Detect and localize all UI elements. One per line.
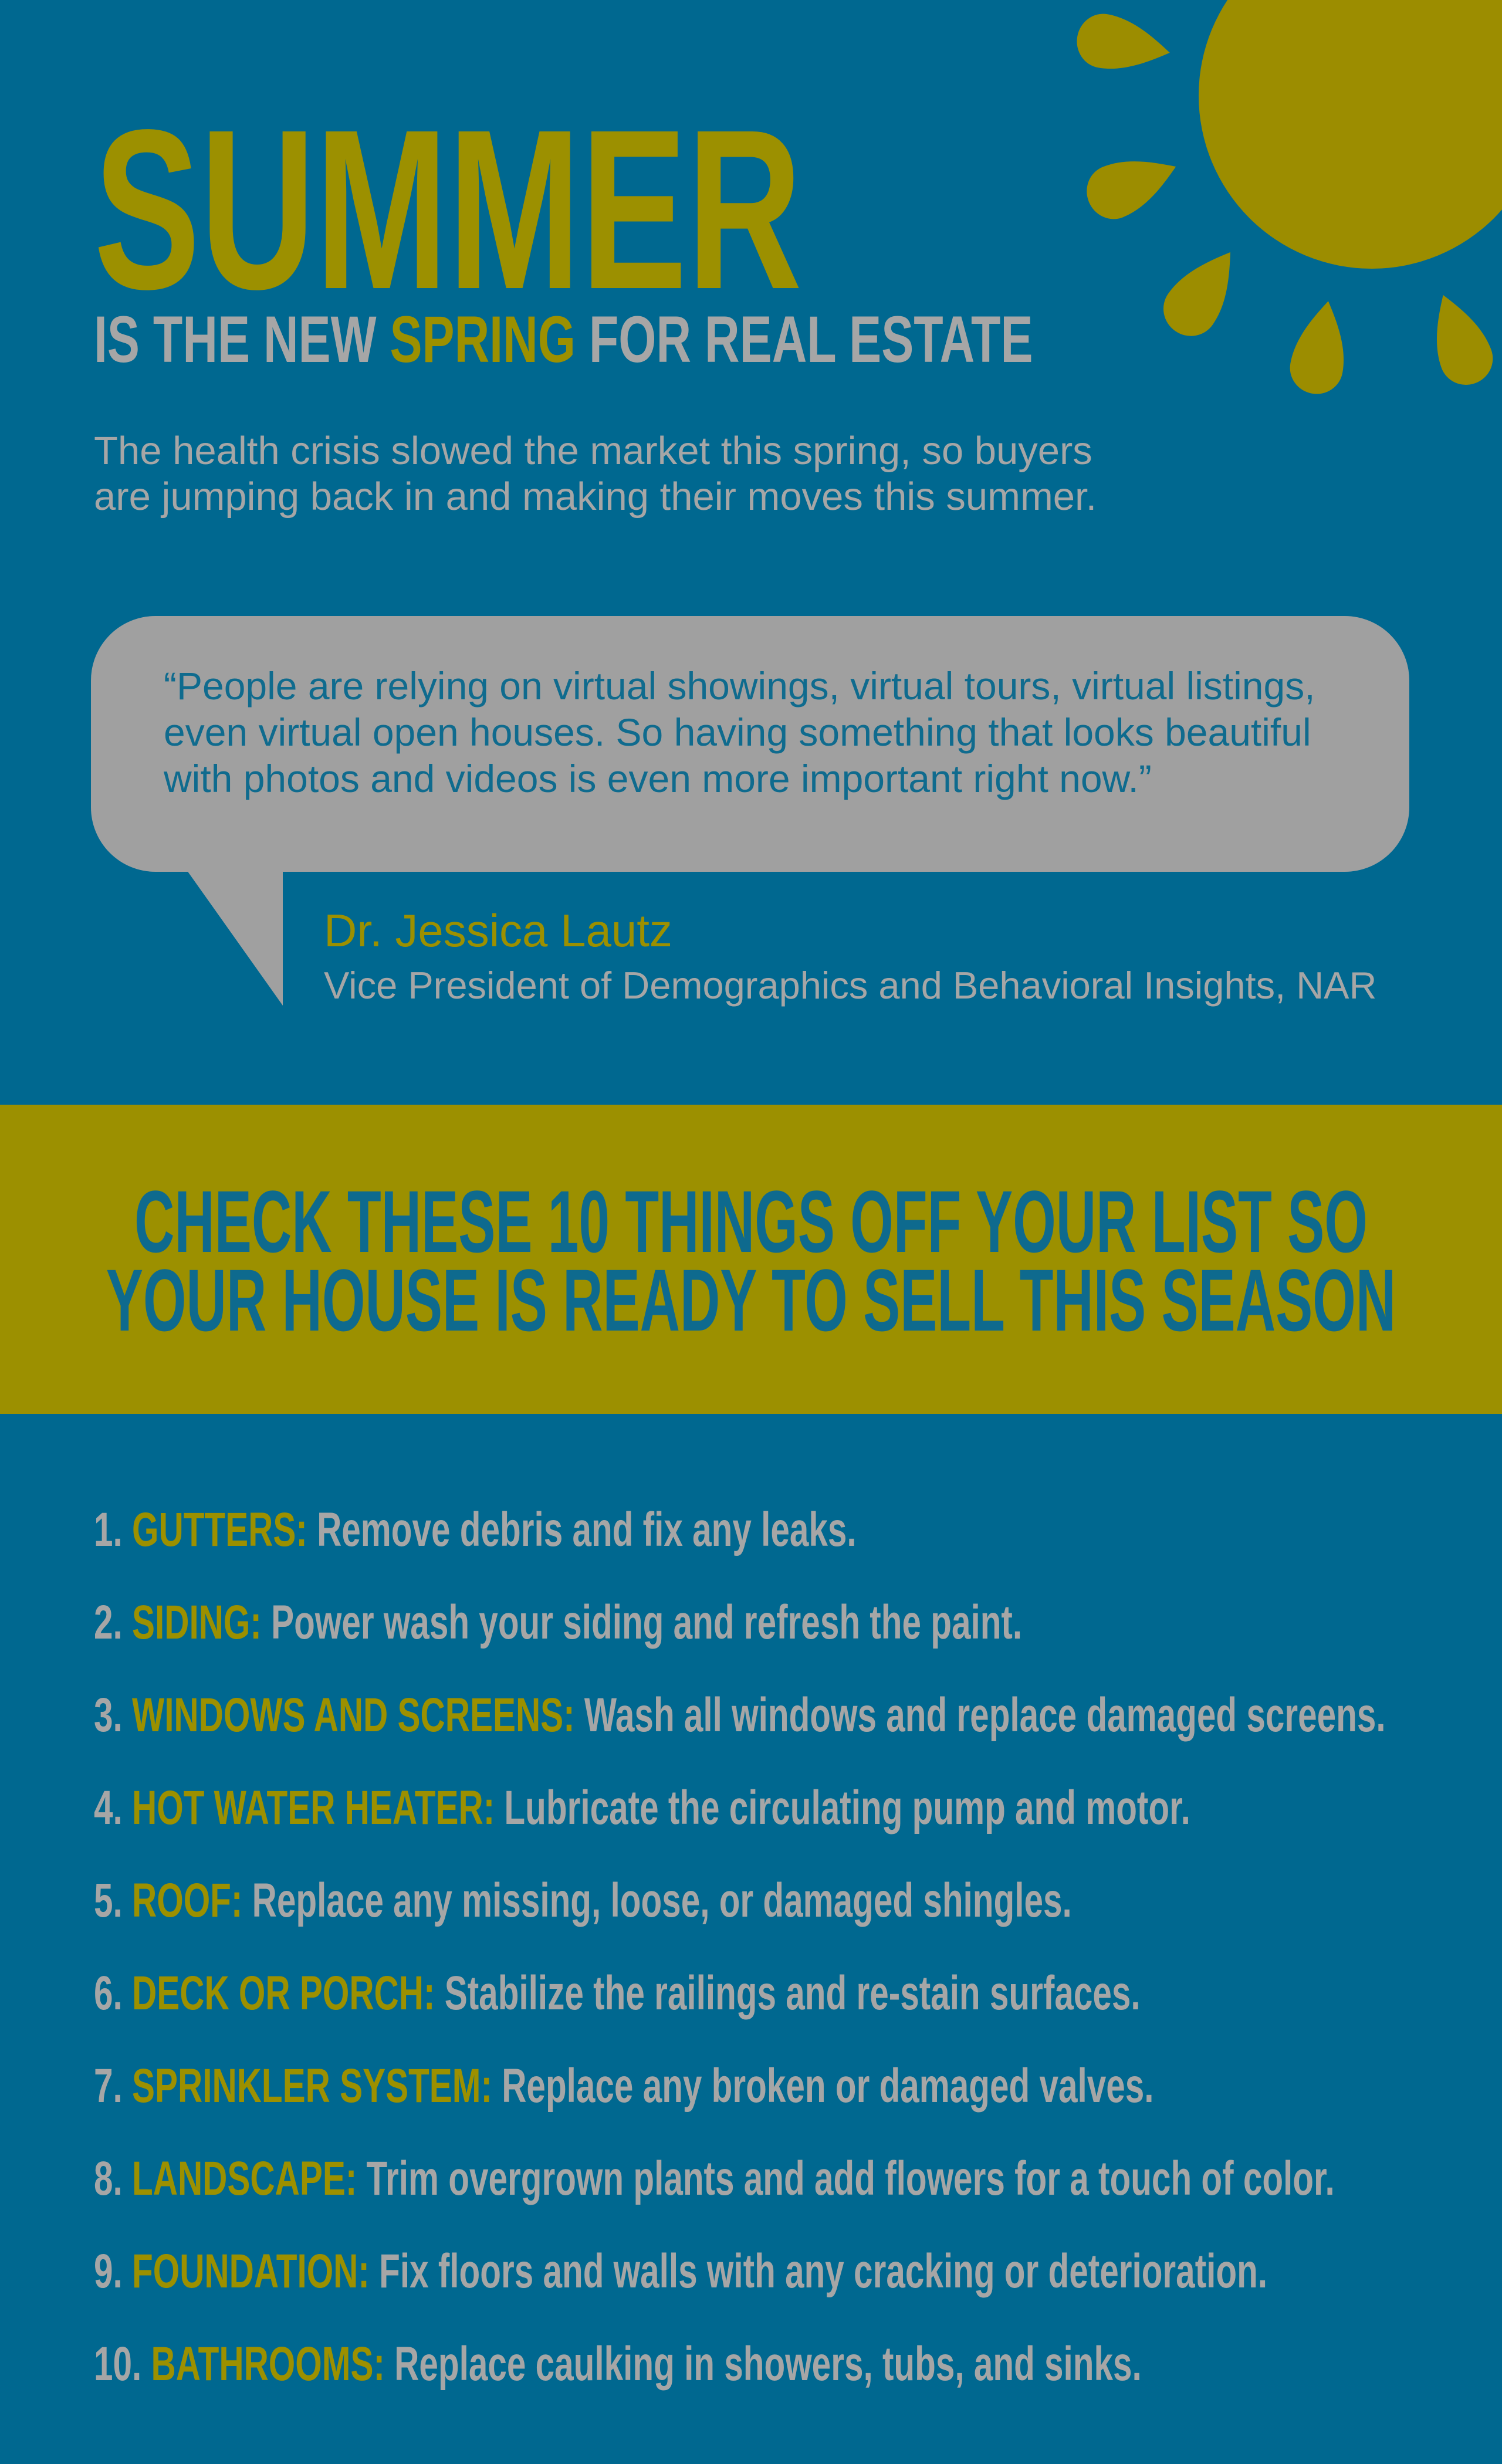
item 5: 5. ROOF: Replace any missing, loose, or damaged shingles. bbox=[94, 1874, 1072, 1927]
item 1: 1. GUTTERS: Remove debris and fix any leaks. bbox=[94, 1503, 857, 1556]
checklist bbox=[94, 1503, 1386, 2391]
intro text bbox=[94, 429, 1097, 519]
title: SUMMER bbox=[94, 83, 802, 337]
quote text: even virtual open houses. So having something that looks beautiful bbox=[164, 710, 1311, 754]
icon: sun bbox=[1077, 0, 1502, 394]
banner text: CHECK THESE 10 THINGS OFF YOUR LIST SO bbox=[134, 1172, 1368, 1271]
attribution name: Dr. Jessica Lautz bbox=[324, 905, 672, 956]
intro text: The health crisis slowed the market this spring, so buyers bbox=[94, 429, 1092, 473]
banner text: YOUR HOUSE IS READY TO SELL THIS SEASON bbox=[106, 1251, 1396, 1349]
item 9: 9. FOUNDATION: Fix floors and walls with any cracking or deterioration. bbox=[94, 2245, 1267, 2298]
item 10: 10. BATHROOMS: Replace caulking in showers, tubs, and sinks. bbox=[94, 2337, 1142, 2391]
item 2: 2. SIDING: Power wash your siding and refresh the paint. bbox=[94, 1596, 1022, 1649]
subtitle: IS THE NEW SPRING FOR REAL ESTATE bbox=[94, 303, 1033, 376]
quote text: “People are relying on virtual showings, virtual tours, virtual listings, bbox=[164, 664, 1315, 708]
item 3: 3. WINDOWS AND SCREENS: Wash all windows and replace damaged screens. bbox=[94, 1688, 1386, 1742]
banner text bbox=[106, 1172, 1396, 1349]
item 8: 8. LANDSCAPE: Trim overgrown plants and add flowers for a touch of color. bbox=[94, 2152, 1335, 2205]
panel: quote bubble bbox=[91, 616, 1409, 1006]
intro text: are jumping back in and making their moves this summer. bbox=[94, 475, 1097, 519]
item 6: 6. DECK OR PORCH: Stabilize the railings and re-stain surfaces. bbox=[94, 1967, 1141, 2020]
quote text bbox=[163, 664, 1315, 800]
attribution title: Vice President of Demographics and Behavioral Insights, NAR bbox=[324, 964, 1376, 1007]
item 4: 4. HOT WATER HEATER: Lubricate the circulating pump and motor. bbox=[94, 1781, 1190, 1835]
item 7: 7. SPRINKLER SYSTEM: Replace any broken or damaged valves. bbox=[94, 2059, 1154, 2113]
bubble shape bbox=[91, 616, 1409, 1006]
quote text: with photos and videos is even more important right now.” bbox=[164, 757, 1152, 800]
banner: checklist heading bbox=[0, 1105, 1502, 1414]
